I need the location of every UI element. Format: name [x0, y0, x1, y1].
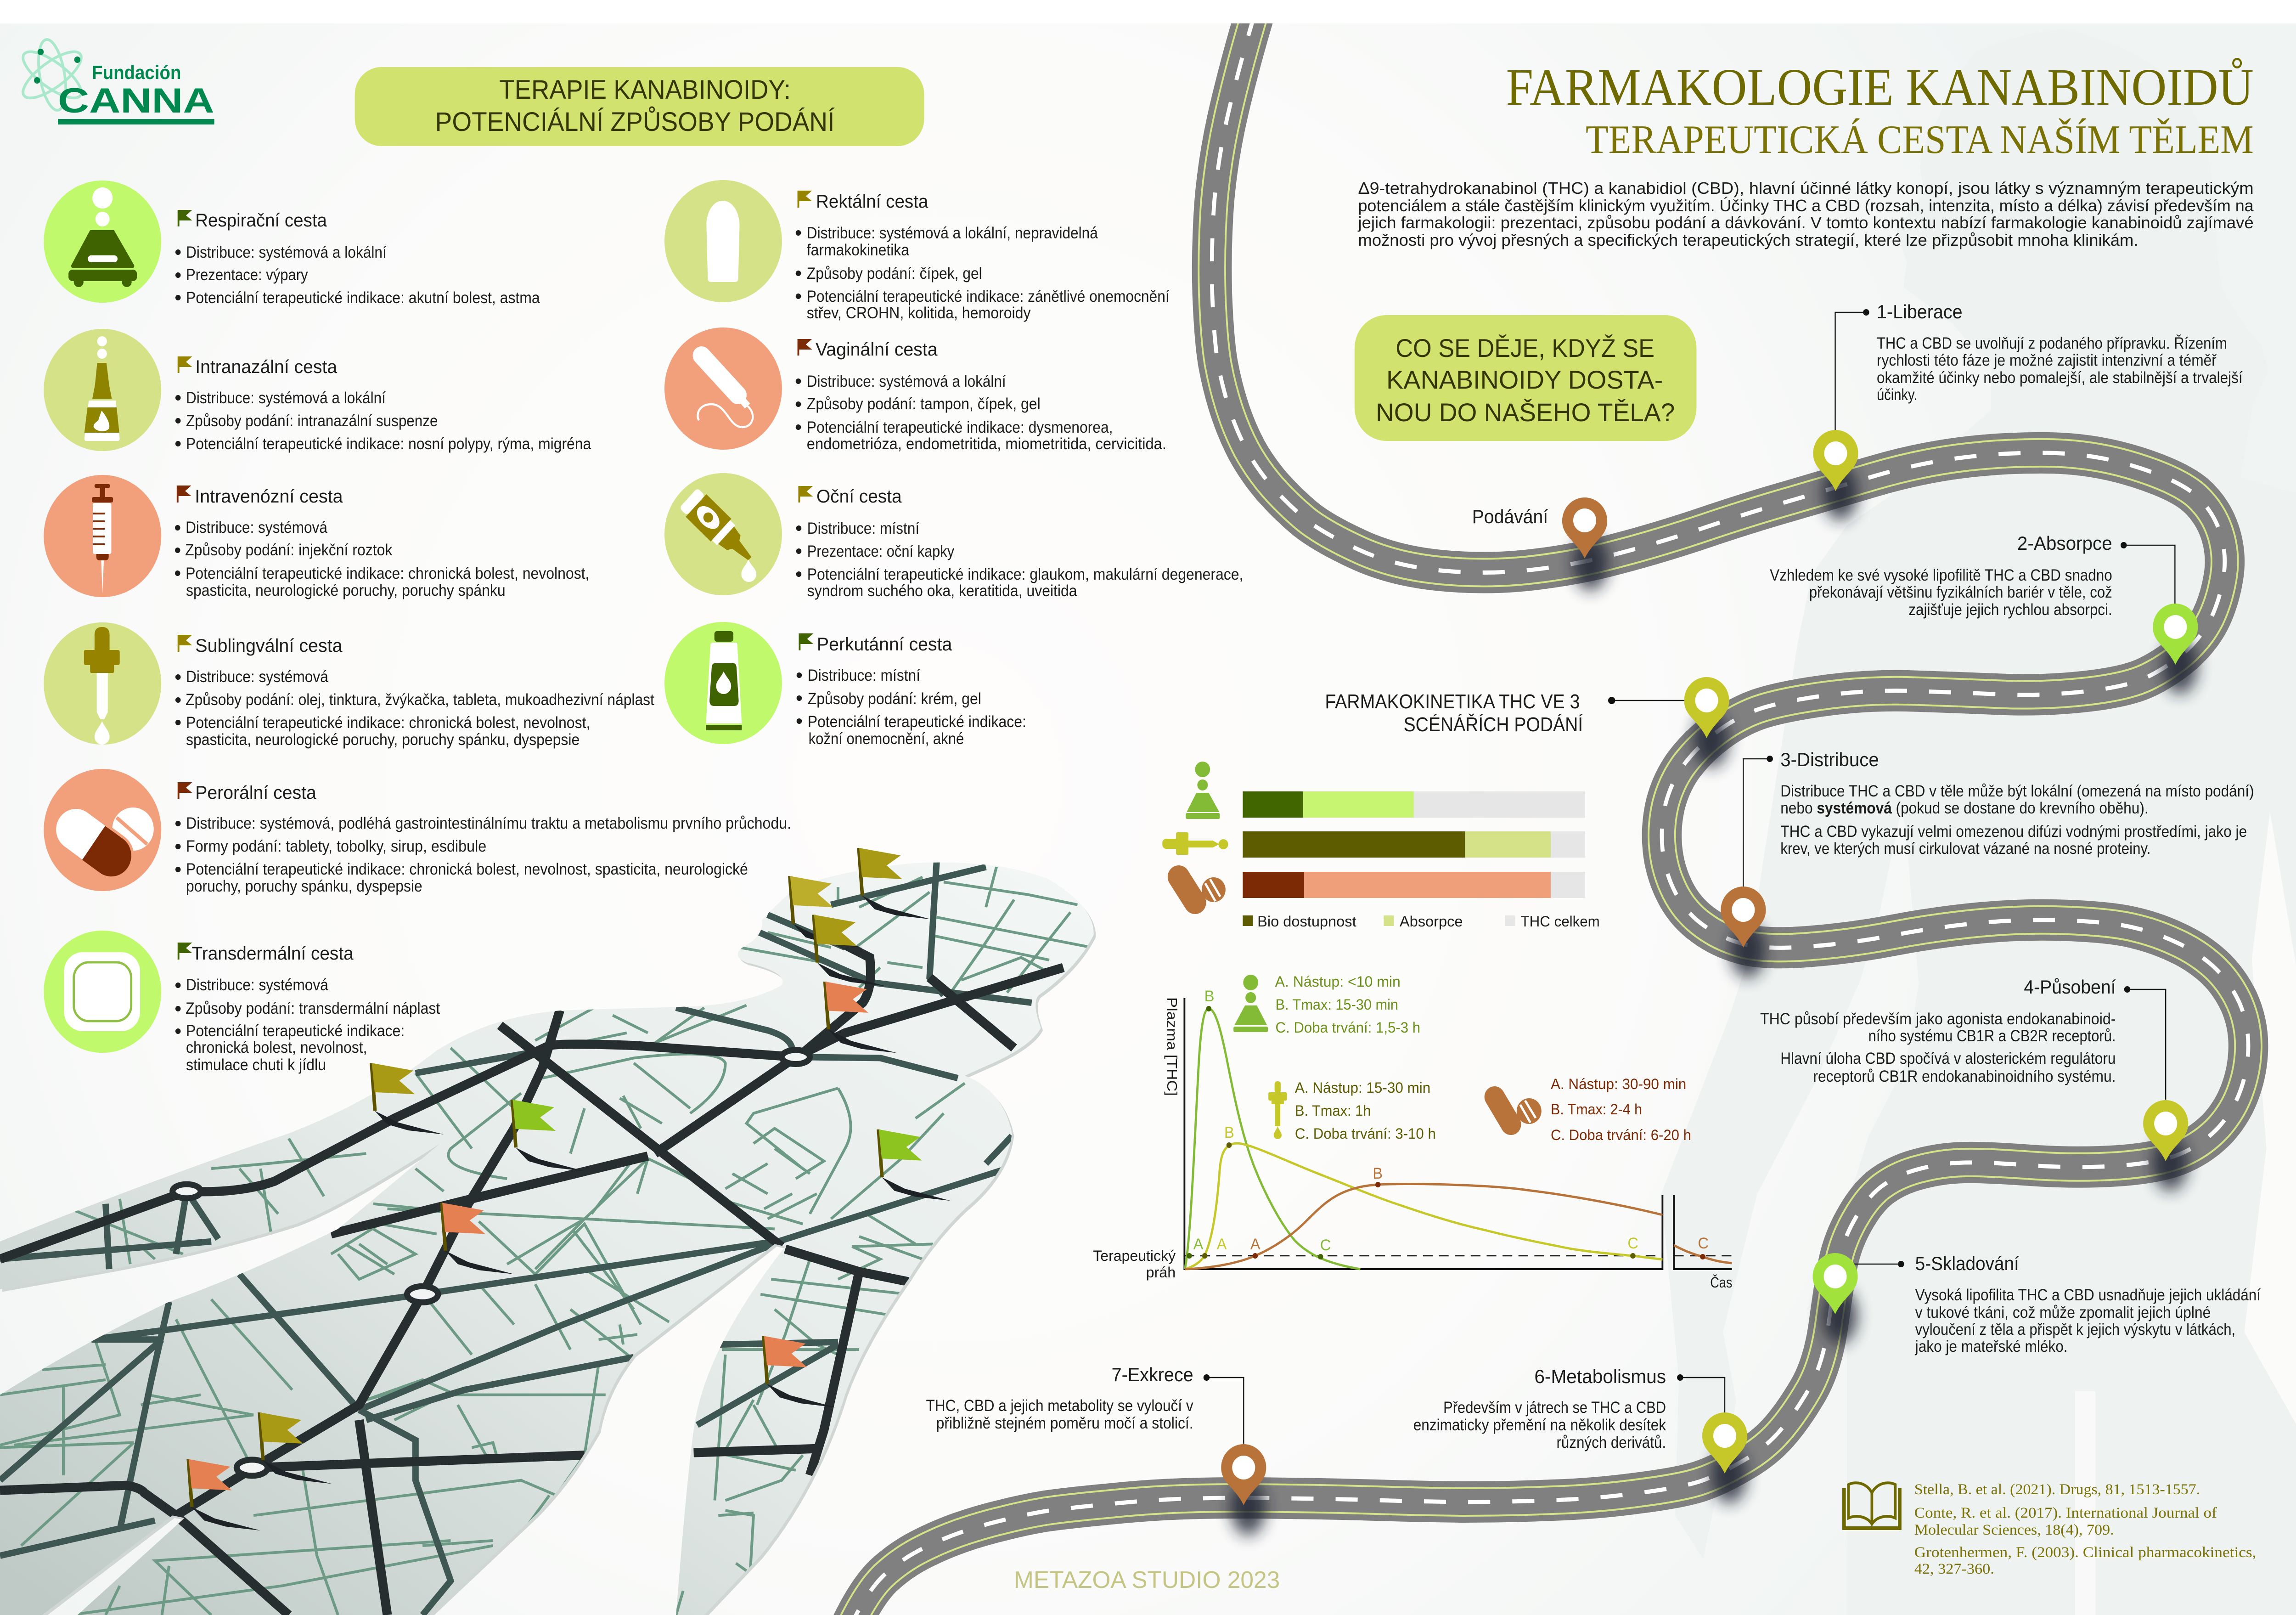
key: sublingual: B. Tmax: 1h: [1295, 1102, 1371, 1119]
intro paragraph: Δ9-tetrahydrokanabinol (THC) a kanabidiol (CBD), hlavní účinné látky konopí, jsou látky s významným terapeutickým: [1358, 179, 2254, 198]
key: sublingual: C. Doba trvání: 3-10 h: [1295, 1125, 1436, 1142]
panel: intravenous route: Distribuce: systémová: [186, 519, 328, 536]
step 2: Absorpce: zajišťuje jejich rychlou absorpci.: [1908, 601, 2112, 619]
main title: [1506, 58, 2254, 162]
panel: ocular route: Oční cesta: [816, 486, 902, 507]
bar row: sublingual: [1243, 831, 1585, 858]
panel: transdermal route: Potenciální terapeutické indikace:: [186, 1022, 405, 1040]
icon: nasal spray: [44, 329, 161, 451]
panel: percutaneous route: Perkutánní cesta: [817, 634, 952, 655]
panel: rectal route: Rektální cesta: [816, 191, 929, 212]
icon: eye drops: [664, 473, 782, 595]
icon: inhaler: [44, 181, 161, 303]
step 5: Skladování: vyloučení z těla a přispět k jejich výskytu v látkách,: [1915, 1321, 2235, 1338]
icon: inhaler: [1186, 762, 1220, 819]
pharmacokinetics heading: FARMAKOKINETIKA THC VE 3: [1325, 690, 1580, 713]
panel: rectal route: [664, 180, 1170, 322]
point letters: B: [1204, 988, 1214, 1005]
logo: Fundación CANNA: Fundación: [92, 62, 181, 83]
key: inhaled: C. Doba trvání: 1,5-3 h: [1276, 1019, 1420, 1036]
panel: transdermal route: stimulace chuti k jídlu: [186, 1056, 326, 1074]
panel: oral route: Potenciální terapeutické indikace: chronická bolest, nevolnost, spasticita, neurologické: [186, 860, 748, 878]
x axis label: Čas: [1710, 1274, 1732, 1291]
intro paragraph: možnosti pro vývoj přesných a specifických terapeutických strategií, které lze přizpůsobit mnoha klinikám.: [1358, 231, 2138, 249]
label: Podávání: Podávání: [1472, 506, 1548, 527]
panel: sublingual route: Potenciální terapeutické indikace: chronická bolest, nevolnost,: [186, 714, 590, 732]
icon: suppository: [664, 180, 782, 302]
title pill: routes of administration: TERAPIE KANABINOIDY:: [499, 75, 791, 105]
key: sublingual: [1268, 1079, 1436, 1142]
panel: percutaneous route: kožní onemocnění, akné: [809, 730, 964, 748]
panel: percutaneous route: [664, 622, 1026, 748]
step 1: Liberace: okamžité účinky nebo pomalejší, ale stabilnější a trvalejší: [1877, 369, 2243, 387]
panel: transdermal route: Způsoby podání: transdermální náplast: [186, 999, 440, 1017]
threshold label: práh: [1146, 1264, 1176, 1281]
line chart: plasma THC over time: [1093, 973, 1732, 1291]
panel: sublingual route: spasticita, neurologické poruchy, poruchy spánku, dyspepsie: [186, 731, 580, 749]
bar row: inhaled: [1243, 791, 1585, 818]
panel: intranasal route: Potenciální terapeutické indikace: nosní polypy, rýma, migréna: [186, 435, 591, 453]
point letters: A: [1217, 1236, 1227, 1253]
intro paragraph: potenciálem a stále častějším klinickým využitím. Účinky THC a CBD (rozsah, intenzita, místo a délka) závisí především na: [1358, 197, 2254, 215]
step 5: Skladování: jako je mateřské mléko.: [1915, 1338, 2068, 1355]
step 1: Liberace: THC a CBD se uvolňují z podaného přípravku. Řízením: [1877, 334, 2227, 352]
panel: sublingual route: Distribuce: systémová: [186, 668, 329, 686]
panel: transdermal route: [44, 931, 440, 1074]
step 4: Působení: THC působí především jako agonista endokanabinoid-: [1760, 1010, 2116, 1028]
step 6: Metabolismus: enzimaticky přemění na několik desítek: [1413, 1416, 1666, 1434]
panel: respiratory route: Respirační cesta: [195, 210, 327, 231]
panel: rectal route: Potenciální terapeutické indikace: zánětlivé onemocnění: [807, 288, 1170, 305]
studio credit: METAZOA STUDIO 2023: [1014, 1566, 1280, 1593]
references: Molecular Sciences, 18(4), 709.: [1914, 1521, 2114, 1538]
icon: syringe: [44, 475, 161, 597]
panel: percutaneous route: Distribuce: místní: [808, 666, 920, 684]
legend: [1243, 913, 1600, 930]
point letters: B: [1373, 1165, 1383, 1182]
panel: oral route: Distribuce: systémová, podléhá gastrointestinálnímu traktu a metabolismu prvního průchodu.: [186, 814, 791, 832]
illustration: human body as a city map with flags: [0, 848, 1096, 1615]
map flags: [186, 848, 951, 1530]
references: Stella, B. et al. (2021). Drugs, 81, 1513-1557.: [1914, 1481, 2200, 1498]
title pill: routes of administration: POTENCIÁLNÍ ZPŮSOBY PODÁNÍ: [435, 107, 835, 137]
main title: TERAPEUTICKÁ CESTA NAŠÍM TĚLEM: [1586, 117, 2254, 162]
step 6: Metabolismus: [1413, 1366, 1747, 1503]
panel: oral route: poruchy, poruchy spánku, dyspepsie: [186, 877, 422, 895]
point letters: A: [1193, 1236, 1204, 1253]
icon: tampon: [664, 328, 782, 450]
panel: intranasal route: Způsoby podání: intranazální suspenze: [186, 412, 438, 430]
logo: Fundación CANNA: CANNA: [58, 81, 214, 120]
step 3: Distribuce: THC a CBD vykazují velmi omezenou difúzi vodnými prostředími, jako je: [1780, 823, 2247, 841]
panel: ocular route: Prezentace: oční kapky: [807, 542, 955, 560]
icon: cream tube: [664, 622, 782, 744]
step 2: Absorpce: překonávají většinu fyzikálních bariér v těle, což: [1809, 583, 2112, 601]
step 3: Distribuce: Distribuce THC a CBD v těle může být lokální (omezená na místo podání): [1780, 782, 2254, 800]
legend: Bio dostupnost: [1257, 913, 1356, 930]
point letters: C: [1320, 1237, 1331, 1254]
intro paragraph: jejich farmakologii: prezentaci, způsobu podání a dávkování. V tomto kontextu nabízí farmakologie kanabinoidů zajímavé: [1357, 214, 2254, 232]
step 7: Exkrece: 7-Exkrece: [1112, 1364, 1193, 1385]
references: 42, 327-360.: [1914, 1560, 1994, 1577]
curve: sublingual: [1185, 1143, 1662, 1269]
step 6: Metabolismus: Především v játrech se THC a CBD: [1443, 1399, 1666, 1417]
step 2: Absorpce: [1770, 532, 2198, 694]
threshold label: Terapeutický: [1093, 1248, 1176, 1264]
curve points: [1187, 1006, 1705, 1259]
step 6: Metabolismus: různých derivátů.: [1556, 1434, 1666, 1451]
step 1: Liberace: [1813, 301, 2243, 520]
step 5: Skladování: v tukové tkáni, což může zpomalit jejich úplné: [1915, 1304, 2211, 1321]
key: oral: B. Tmax: 2-4 h: [1551, 1101, 1642, 1118]
panel: intravenous route: spasticita, neurologické poruchy, poruchy spánku: [186, 582, 506, 599]
panel: sublingual route: [44, 622, 654, 749]
icon: dropper: [1162, 832, 1228, 855]
panel: rectal route: Distribuce: systémová a lokální, nepravidelná: [807, 224, 1098, 242]
step 5: Skladování: [1812, 1253, 2261, 1355]
panel: intravenous route: Způsoby podání: injekční roztok: [185, 541, 393, 559]
panel: vaginal route: Potenciální terapeutické indikace: dysmenorea,: [807, 418, 1113, 436]
panel: ocular route: Potenciální terapeutické indikace: glaukom, makulární degenerace,: [807, 565, 1243, 583]
pharmacokinetics heading: [1325, 677, 1729, 767]
panel: sublingual route: Sublingvální cesta: [195, 635, 343, 656]
point letters: B: [1224, 1124, 1234, 1141]
icon: book: [1844, 1483, 1900, 1528]
step 4: Působení: receptorů CB1R endokanabinoidního systému.: [1813, 1067, 2116, 1085]
panel: respiratory route: Distribuce: systémová a lokální: [186, 243, 387, 261]
legend: Absorpce: [1400, 913, 1463, 930]
axes: [1184, 998, 1732, 1269]
panel: respiratory route: Prezentace: výpary: [186, 266, 308, 284]
panel: ocular route: syndrom suchého oka, keratitida, uveitida: [807, 582, 1077, 600]
step 1: Liberace: rychlosti této fáze je možné zajistit intenzivní a téměř: [1877, 351, 2217, 369]
step 7: Exkrece: přibližně stejném poměru močí a stolicí.: [936, 1414, 1193, 1432]
key: inhaled: [1233, 973, 1420, 1036]
references: Grotenhermen, F. (2003). Clinical pharmacokinetics,: [1914, 1544, 2256, 1561]
step 4: Působení: ního systému CB1R a CB2R receptorů.: [1868, 1027, 2116, 1045]
point letters: C: [1627, 1235, 1638, 1252]
question pill: NOU DO NAŠEHO TĚLA?: [1376, 398, 1675, 427]
step 7: Exkrece: [926, 1364, 1266, 1535]
panel: percutaneous route: Způsoby podání: krém, gel: [808, 690, 981, 708]
icon: pills: [1179, 877, 1226, 903]
main title: FARMAKOLOGIE KANABINOIDŮ: [1506, 58, 2254, 116]
threshold label: [1093, 1248, 1176, 1281]
panel: percutaneous route: Potenciální terapeutické indikace:: [808, 713, 1026, 731]
title pill: routes of administration: [355, 67, 924, 146]
step 7: Exkrece: THC, CBD a jejich metabolity se vyloučí v: [926, 1397, 1193, 1415]
panel: vaginal route: Distribuce: systémová a lokální: [807, 373, 1006, 390]
winding road: [850, 14, 2248, 1615]
panel: rectal route: střev, CROHN, kolitida, hemoroidy: [807, 304, 1031, 322]
panel: rectal route: Způsoby podání: čípek, gel: [807, 265, 982, 282]
logo: Fundación CANNA: [17, 37, 214, 124]
panel: respiratory route: Potenciální terapeutické indikace: akutní bolest, astma: [186, 289, 540, 307]
pharmacokinetics heading: SCÉNÁŘÍCH PODÁNÍ: [1404, 713, 1583, 736]
step 6: Metabolismus: 6-Metabolismus: [1534, 1366, 1666, 1387]
panel: intranasal route: Distribuce: systémová a lokální: [186, 389, 386, 407]
step 5: Skladování: Vysoká lipofilita THC a CBD usnadňuje jejich ukládání: [1915, 1286, 2261, 1304]
point letters: C: [1698, 1235, 1709, 1252]
icon: patch: [44, 931, 161, 1053]
y axis label: Plazma [THC]: [1164, 997, 1180, 1096]
key: sublingual: A. Nástup: 15-30 min: [1295, 1079, 1430, 1096]
question pill: [1355, 315, 1696, 441]
step 4: Působení: 4-Působení: [2024, 976, 2116, 998]
curve: oral: [1185, 1184, 1732, 1269]
icon: pills: [44, 769, 161, 891]
panel: ocular route: Distribuce: místní: [807, 520, 920, 537]
panel: intravenous route: Intravenózní cesta: [195, 486, 343, 507]
panel: intranasal route: [44, 329, 591, 453]
curve: inhaled: [1185, 1009, 1360, 1269]
intro paragraph: [1357, 179, 2254, 249]
panel: sublingual route: Způsoby podání: olej, tinktura, žvýkačka, tableta, mukoadhezivní náplast: [186, 691, 654, 709]
panel: intravenous route: [44, 475, 589, 599]
bar row: oral: [1243, 872, 1585, 898]
step 1: Liberace: účinky.: [1877, 386, 1917, 404]
panel: oral route: Formy podání: tablety, tobolky, sirup, esdibule: [186, 837, 486, 855]
step 5: Skladování: 5-Skladování: [1915, 1253, 2019, 1274]
key: inhaled: A. Nástup: <10 min: [1275, 973, 1401, 990]
panel: transdermal route: Distribuce: systémová: [186, 976, 329, 994]
panel: oral route: Perorální cesta: [195, 782, 316, 803]
step 3: Distribuce: 3-Distribuce: [1780, 749, 1879, 770]
background body silhouette: [1661, 29, 2296, 1615]
panel: vaginal route: Způsoby podání: tampon, čípek, gel: [807, 395, 1041, 413]
step 3: Distribuce: [1721, 749, 2254, 977]
panel: rectal route: farmakokinetika: [807, 241, 910, 259]
panel: transdermal route: chronická bolest, nevolnost,: [186, 1039, 367, 1056]
step 4: Působení: [1760, 976, 2188, 1191]
panel: oral route: [44, 769, 791, 895]
panel: ocular route: [664, 473, 1243, 600]
panel: vaginal route: [664, 328, 1166, 453]
legend: THC celkem: [1521, 913, 1600, 930]
question pill: KANABINOIDY DOSTA-: [1386, 365, 1663, 394]
panel: vaginal route: Vaginální cesta: [816, 339, 938, 360]
panel: intranasal route: Intranazální cesta: [195, 356, 337, 377]
panel: intravenous route: Potenciální terapeutické indikace: chronická bolest, nevolnost,: [186, 565, 589, 582]
step 4: Působení: Hlavní úloha CBD spočívá v alosterickém regulátoru: [1780, 1050, 2116, 1067]
point letters: [1193, 988, 1709, 1254]
panel: transdermal route: Transdermální cesta: [192, 943, 354, 964]
key: oral: A. Nástup: 30-90 min: [1551, 1076, 1686, 1092]
pin: Podávání: [1562, 497, 1608, 590]
references: Conte, R. et al. (2017). International Journal of: [1914, 1504, 2217, 1521]
panel: respiratory route: [44, 181, 540, 307]
step 1: Liberace: 1-Liberace: [1877, 301, 1963, 322]
references: [1914, 1481, 2256, 1577]
step 3: Distribuce: krev, ve kterých musí cirkulovat vázané na nosné proteiny.: [1780, 840, 2150, 858]
point letters: A: [1250, 1236, 1261, 1253]
key: oral: [1495, 1076, 1691, 1143]
bar chart: bioavailability, absorption, total THC: [1162, 762, 1600, 930]
step 2: Absorpce: 2-Absorpce: [2017, 532, 2112, 554]
panel: vaginal route: endometrióza, endometritida, miometritida, cervicitida.: [807, 435, 1166, 453]
question pill: CO SE DĚJE, KDYŽ SE: [1396, 333, 1654, 362]
step 3: Distribuce: nebo systémová (pokud se dostane do krevního oběhu).: [1780, 799, 2149, 817]
step 2: Absorpce: Vzhledem ke své vysoké lipofilitě THC a CBD snadno: [1770, 566, 2112, 584]
icon: dropper: [44, 622, 161, 745]
key: inhaled: B. Tmax: 15-30 min: [1276, 996, 1398, 1013]
key: oral: C. Doba trvání: 6-20 h: [1551, 1127, 1691, 1143]
